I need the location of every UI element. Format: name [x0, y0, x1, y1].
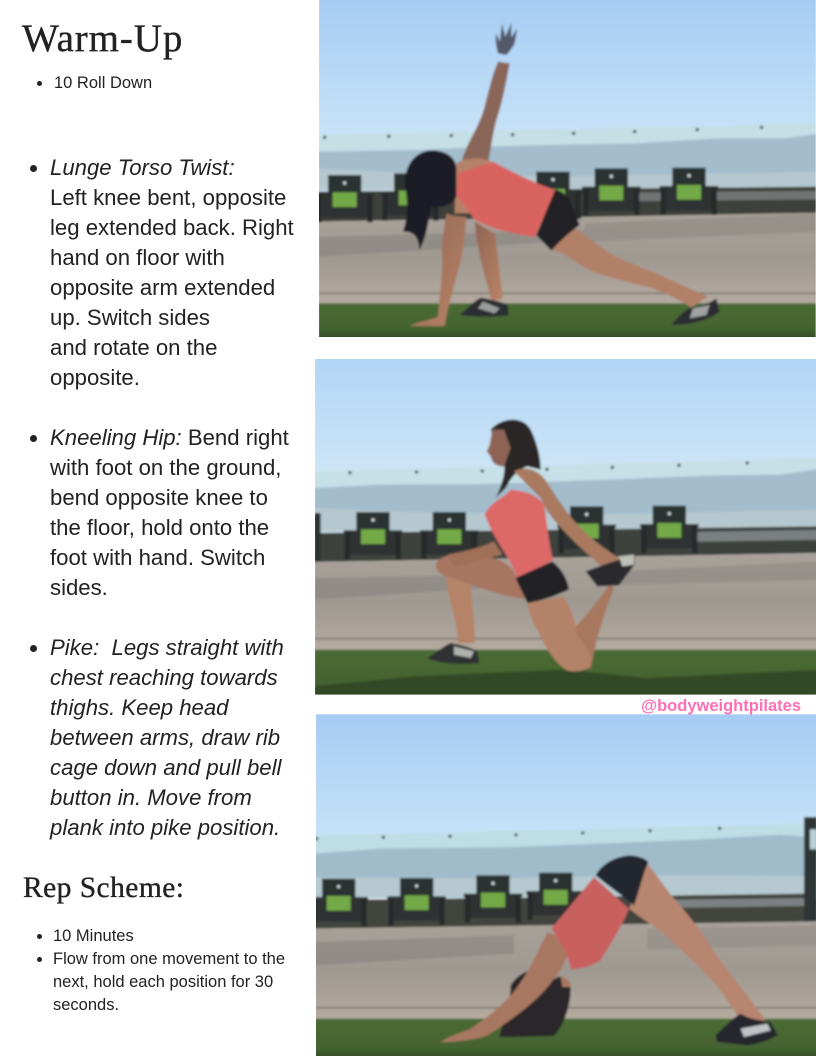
background: chairs [309, 873, 585, 926]
exercise text: Kneeling Hip: Kneeling Hip: Bend right [50, 425, 289, 450]
figure: woman in side lunge twist [403, 23, 720, 326]
background: sky [314, 712, 816, 899]
figure: woman kneeling [427, 420, 635, 671]
photo: lunge torso twist [315, 0, 816, 340]
figure: woman in pike [441, 855, 778, 1045]
background: terrace floor [318, 213, 816, 305]
background: sky [318, 0, 816, 197]
exercise text: Pike: thighs. Keep head [50, 695, 228, 720]
rep scheme list: 10 Minutes [53, 927, 134, 945]
exercise text: Lunge Torso Twist: leg extended back. Right [50, 215, 294, 240]
background: wall [314, 526, 816, 562]
exercise text: Lunge Torso Twist: opposite. [50, 365, 140, 390]
exercise text: Kneeling Hip: foot with hand. Switch [50, 545, 265, 570]
exercise text: Kneeling Hip: with foot on the ground, [50, 455, 281, 480]
background: sky [314, 355, 816, 541]
background: wall and post [314, 817, 816, 929]
exercise text: Pike: plank into pike position. [50, 815, 280, 840]
exercise text: Lunge Torso Twist: opposite arm extended [50, 275, 275, 300]
rep scheme list: Flow from one movement to the [53, 950, 285, 968]
background: rooftop glass and mountains [314, 824, 807, 899]
watermark: @bodyweightpilates: @bodyweightpilates [641, 697, 801, 715]
rep scheme list [37, 927, 285, 1014]
exercise text: Lunge Torso Twist: up. Switch sides [50, 305, 210, 330]
exercise text: Kneeling Hip [30, 425, 289, 600]
exercise text: Lunge Torso Twist: Left knee bent, opposite [50, 185, 286, 210]
photo: kneeling hip stretch [314, 355, 816, 696]
background: grass [315, 648, 816, 688]
exercise text: Pike: Pike: Legs straight with [50, 635, 284, 660]
warm-up list item: 10 Roll Down: 10 Roll Down [54, 74, 152, 92]
exercise text: Kneeling Hip: bend opposite knee to [50, 485, 268, 510]
exercise text: Pike: chest reaching towards [50, 665, 278, 690]
exercise text: Kneeling Hip: sides. [50, 575, 108, 600]
background: terrace floor [314, 553, 816, 651]
background: grass [318, 303, 816, 340]
background: rooftop glass and mountains [318, 123, 816, 190]
rep scheme list: seconds. [53, 996, 119, 1014]
exercise text: Kneeling Hip: the floor, hold onto the [50, 515, 269, 540]
photo: pike position [309, 712, 816, 1056]
background: grass [314, 1019, 816, 1056]
background: chairs [315, 168, 718, 222]
exercise text: Lunge Torso Twist: Lunge Torso Twist: [50, 155, 235, 180]
exercise text: Pike: cage down and pull bell [50, 755, 281, 780]
exercise text: Pike: button in. Move from [50, 785, 252, 810]
background: terrace floor [314, 921, 816, 1020]
exercise text: Pike [30, 635, 284, 840]
title: Warm-Up: Warm-Up [22, 17, 183, 60]
exercise text: Lunge Torso Twist: and rotate on the [50, 335, 217, 360]
exercise text: Pike: between arms, draw rib [50, 725, 280, 750]
exercise text: Lunge Torso Twist [30, 155, 294, 390]
background: wall [318, 187, 816, 222]
rep scheme list: next, hold each position for 30 [53, 973, 273, 991]
exercise text: Lunge Torso Twist: hand on floor with [50, 245, 225, 270]
background: chairs [314, 506, 699, 561]
heading: Rep Scheme: Rep Scheme: [23, 872, 184, 904]
background: rooftop glass and mountains [314, 458, 816, 531]
